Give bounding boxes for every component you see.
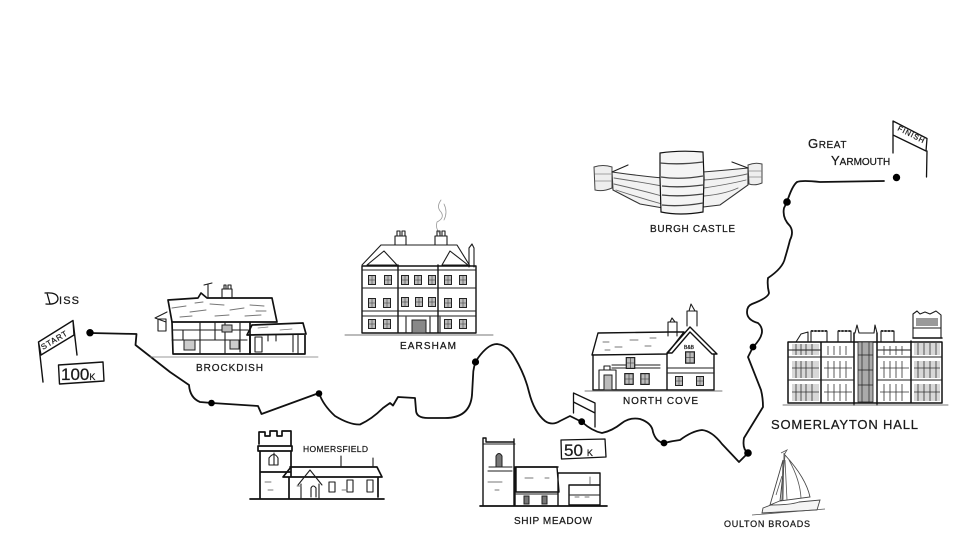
label: Brockdish: BROCKDISH <box>196 363 263 374</box>
label: Burgh Castle: BURGH CASTLE <box>650 224 735 235</box>
building: Earsham <box>345 200 493 352</box>
route line <box>90 181 884 462</box>
building: North Cove <box>585 304 722 407</box>
50k distance box: 50 K <box>564 441 593 460</box>
100k distance box <box>58 362 104 384</box>
label: Ship Meadow: SHIP MEADOW <box>514 516 593 527</box>
Diss label: ISS <box>59 295 79 307</box>
Great Yarmouth label <box>808 136 890 168</box>
building: Brockdish <box>150 283 318 374</box>
building: Ship Meadow <box>480 438 607 527</box>
building: Homersfield church <box>250 431 384 499</box>
building: North Cove: B&B <box>684 345 695 351</box>
50k distance box <box>561 439 606 460</box>
route waypoint dots <box>86 174 900 457</box>
finish flag: FINISH <box>896 124 926 145</box>
building: Somerleyton Hall <box>771 311 948 432</box>
building: Burgh Castle ruins <box>594 151 762 235</box>
label: Earsham: EARSHAM <box>400 341 456 352</box>
Great Yarmouth label: GREAT <box>808 136 847 151</box>
halfway flag <box>574 393 595 427</box>
label: Somerleyton Hall: SOMERLAYTON HALL <box>771 417 918 432</box>
start flag <box>38 320 77 382</box>
finish flag <box>893 121 927 177</box>
Great Yarmouth label: YARMOUTH <box>831 153 890 168</box>
start flag: START <box>39 329 69 352</box>
label: Oulton Broads: OULTON BROADS <box>724 519 810 529</box>
icon: sailboat at Oulton Broads <box>724 450 825 529</box>
label: Homersfield: HOMERSFIELD <box>303 444 368 454</box>
Diss label <box>45 293 79 307</box>
label: North Cove: NORTH COVE <box>623 396 698 407</box>
100k distance box: 100K <box>61 365 95 384</box>
